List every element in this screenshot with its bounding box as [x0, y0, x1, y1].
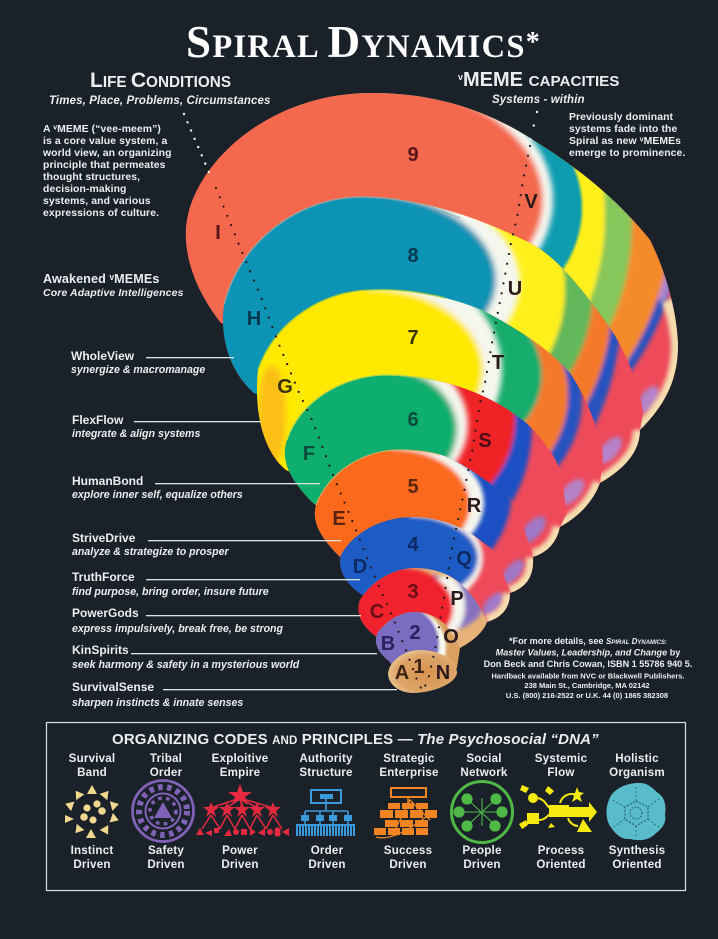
- icon: holistic organism: [606, 783, 665, 840]
- level 5 upper rim: [316, 450, 440, 505]
- left letters: life conditions stages: B: [381, 633, 395, 655]
- label: humanbond: explore inner self, equalize others: [72, 489, 243, 501]
- label: powergods: PowerGods: [72, 606, 139, 620]
- left letters: life conditions stages: C: [370, 601, 384, 623]
- level 6 upper rim: [287, 375, 435, 440]
- right letters: meme capacity stages: R: [467, 495, 482, 517]
- column: holistic organism: Oriented: [612, 858, 662, 871]
- label: strivedrive: StriveDrive: [72, 531, 136, 545]
- label: strivedrive: [72, 531, 341, 558]
- text block: meme definition: is a core value system, a: [43, 136, 167, 147]
- column: tribal order: Tribal: [150, 752, 182, 765]
- column: strategic enterprise: Success: [384, 844, 432, 857]
- column: survival band: Band: [77, 766, 107, 779]
- left letters: life conditions stages: E: [332, 508, 346, 530]
- label: truthforce: [72, 570, 360, 598]
- heading: awakened memes: Awakened ᵛMEMEs: [43, 272, 159, 286]
- level numbers: 7: [407, 327, 419, 349]
- level numbers: 2: [409, 622, 421, 644]
- column: strategic enterprise: [374, 752, 439, 871]
- icon: survival band: [64, 785, 120, 838]
- column: tribal order: [132, 752, 194, 871]
- left letters: life conditions stages: I: [215, 222, 221, 244]
- column: survival band: [64, 752, 120, 871]
- footnote: further details: U.S. (800) 216-2522 or U.K. 44 (0) 1865 382308: [506, 691, 668, 700]
- column: exploitive empire: Exploitive: [212, 752, 269, 765]
- left letters: life conditions stages: A: [395, 662, 409, 684]
- column: authority structure: [296, 752, 355, 871]
- column: authority structure: Order: [311, 844, 344, 857]
- level numbers: 8: [407, 245, 419, 267]
- right letters: meme capacity stages: T: [492, 352, 504, 374]
- right letters: meme capacity stages: O: [443, 626, 459, 648]
- column: holistic organism: Holistic: [615, 752, 659, 765]
- text block: meme definition: expressions of culture.: [43, 208, 159, 219]
- right letters: meme capacity stages: P: [450, 588, 464, 610]
- column: social network: [452, 752, 512, 871]
- text block: meme definition: systems, and various: [43, 196, 151, 207]
- column: holistic organism: [606, 752, 665, 871]
- label: flexflow: integrate & align systems: [72, 428, 200, 440]
- level 6 band with rainbow tail: [284, 375, 567, 557]
- column: authority structure: Driven: [308, 858, 346, 871]
- column: tribal order: Order: [150, 766, 183, 779]
- level 4 band with tail: [340, 517, 510, 622]
- column: social network: People: [462, 844, 502, 857]
- label: wholeview: [71, 349, 234, 376]
- column: exploitive empire: [196, 752, 289, 871]
- column: survival band: Instinct: [71, 844, 113, 857]
- text block: previously dominant: Previously dominant: [569, 112, 674, 123]
- right letters: meme capacity stages: [436, 191, 538, 684]
- footnote: further details: 238 Main St., Cambridge, MA 02142: [524, 681, 650, 690]
- level 7 band with rainbow tail: [257, 290, 603, 527]
- label: powergods: express impulsively, break free, be strong: [72, 623, 284, 635]
- label: flexflow: FlexFlow: [72, 413, 124, 427]
- column: systemic flow: Process: [538, 844, 584, 857]
- column: social network: Driven: [463, 858, 501, 871]
- column: exploitive empire: Driven: [221, 858, 259, 871]
- column: holistic organism: Organism: [609, 766, 665, 779]
- dotted line: meme capacities: [423, 112, 537, 690]
- spiral cone: [186, 93, 678, 693]
- left letters: life conditions stages: [215, 222, 409, 684]
- footnote: further details: [484, 636, 692, 700]
- label: kinspirits: [72, 643, 377, 671]
- text block: meme definition: principle that permeates: [43, 160, 166, 171]
- panel: organizing codes: [46, 722, 686, 890]
- column: exploitive empire: Empire: [220, 766, 261, 779]
- left letters: life conditions stages: F: [303, 443, 315, 465]
- icon: exploitive empire: [196, 784, 289, 837]
- level numbers: 6: [407, 409, 419, 431]
- label: survivalsense: SurvivalSense: [72, 680, 154, 694]
- column: strategic enterprise: Strategic: [383, 752, 435, 765]
- right letters: meme capacity stages: S: [478, 430, 492, 452]
- column: authority structure: Authority: [299, 752, 353, 765]
- right letters: meme capacity stages: V: [524, 191, 538, 213]
- label: survivalsense: sharpen instincts & innate senses: [72, 697, 243, 709]
- label: humanbond: HumanBond: [72, 474, 143, 488]
- title: *: [526, 27, 541, 58]
- column: holistic organism: Synthesis: [609, 844, 665, 857]
- level 2 band with tail: [376, 612, 460, 668]
- label: strivedrive: analyze & strategize to prosper: [72, 546, 229, 558]
- level 1 base: [388, 650, 457, 693]
- text block: meme definition: world view, an organizing: [42, 148, 172, 159]
- label: powergods: [72, 606, 361, 635]
- text block: previously dominant: Spiral as new ᵛMEMEs: [569, 136, 681, 147]
- label: humanbond: [72, 474, 320, 501]
- column: strategic enterprise: Enterprise: [379, 766, 439, 779]
- column: exploitive empire: Power: [222, 844, 258, 857]
- footnote: further details: Don Beck and Chris Cowan, ISBN 1 55786 940 5.: [484, 659, 692, 669]
- icon: social network: [452, 782, 512, 842]
- icon: systemic flow: [519, 785, 597, 832]
- icon: tribal order: [132, 780, 194, 842]
- heading: meme capacities: [458, 69, 619, 106]
- column: systemic flow: Systemic: [535, 752, 588, 765]
- level 7 upper rim: [258, 290, 445, 370]
- level numbers: [407, 144, 425, 678]
- left letters: life conditions stages: H: [247, 308, 261, 330]
- footnote: further details: Master Values, Leadership, and Change by: [496, 648, 681, 658]
- heading: life conditions: [49, 69, 271, 107]
- text block: meme definition: decision-making: [43, 184, 126, 195]
- icon: authority structure: [296, 790, 355, 836]
- level 5 band with tail: [314, 450, 534, 593]
- panel heading: ORGANIZING CODES AND PRINCIPLES — The Psychosocial “DNA”: [112, 731, 599, 748]
- level 8 band with rainbow tail: [223, 197, 643, 483]
- heading: awakened memes: [43, 272, 184, 299]
- label: kinspirits: KinSpirits: [72, 643, 129, 657]
- text block: meme definition: thought structures,: [43, 172, 140, 183]
- label: flexflow: [72, 413, 261, 440]
- heading: meme capacities: CAPACITIES: [529, 73, 619, 90]
- level numbers: 4: [407, 534, 419, 556]
- level 9 band with rainbow tail: [186, 93, 678, 430]
- dotted line: life conditions: [184, 114, 422, 690]
- right letters: meme capacity stages: U: [508, 278, 522, 300]
- label: kinspirits: seek harmony & safety in a mysterious world: [72, 659, 300, 671]
- level numbers: 9: [407, 144, 419, 166]
- level numbers: 5: [407, 476, 419, 498]
- column: tribal order: Safety: [148, 844, 184, 857]
- column: systemic flow: Flow: [547, 766, 575, 779]
- column: social network: Network: [460, 766, 508, 779]
- text block: previously dominant: systems fade into the: [569, 124, 677, 135]
- level 8 upper rim: [224, 197, 460, 305]
- heading: meme capacities: v: [458, 72, 463, 82]
- label: survivalsense: [72, 680, 397, 709]
- column: authority structure: Structure: [299, 766, 353, 779]
- heading: life conditions: Times, Place, Problems, Circumstances: [49, 95, 271, 107]
- left letters: life conditions stages: D: [353, 556, 367, 578]
- heading: life conditions: LIFE CONDITIONS: [90, 69, 231, 92]
- right letters: meme capacity stages: N: [436, 662, 450, 684]
- level 3 band with tail: [358, 568, 487, 648]
- column: strategic enterprise: Driven: [389, 858, 427, 871]
- column: survival band: Driven: [73, 858, 111, 871]
- label: wholeview: WholeView: [71, 349, 135, 363]
- column: survival band: Survival: [69, 752, 115, 765]
- level numbers: 3: [407, 581, 419, 603]
- column: systemic flow: Oriented: [536, 858, 586, 871]
- text block: previously dominant: emerge to prominence.: [569, 148, 685, 159]
- footnote: further details: *For more details, see SPIRAL DYNAMICS:: [509, 636, 667, 646]
- heading: meme capacities: Systems - within: [492, 94, 585, 106]
- level numbers: 1: [413, 656, 425, 678]
- footnote: further details: Hardback available from NVC or Blackwell Publishers.: [492, 672, 684, 680]
- title: SPIRAL DYNAMICS: [186, 17, 526, 67]
- heading: awakened memes: Core Adaptive Intelligences: [43, 287, 184, 299]
- text block: meme definition: A ᵛMEME (“vee-meem”): [43, 124, 161, 135]
- icon: strategic enterprise: [374, 788, 437, 838]
- label: wholeview: synergize & macromanage: [71, 364, 205, 376]
- label: truthforce: find purpose, bring order, insure future: [72, 586, 269, 598]
- column: systemic flow: [519, 752, 597, 871]
- right letters: meme capacity stages: Q: [456, 548, 472, 570]
- left letters: life conditions stages: G: [277, 376, 293, 398]
- column: social network: Social: [466, 752, 502, 765]
- column: tribal order: Driven: [147, 858, 185, 871]
- heading: meme capacities: MEME: [463, 69, 529, 91]
- label: truthforce: TruthForce: [72, 570, 135, 584]
